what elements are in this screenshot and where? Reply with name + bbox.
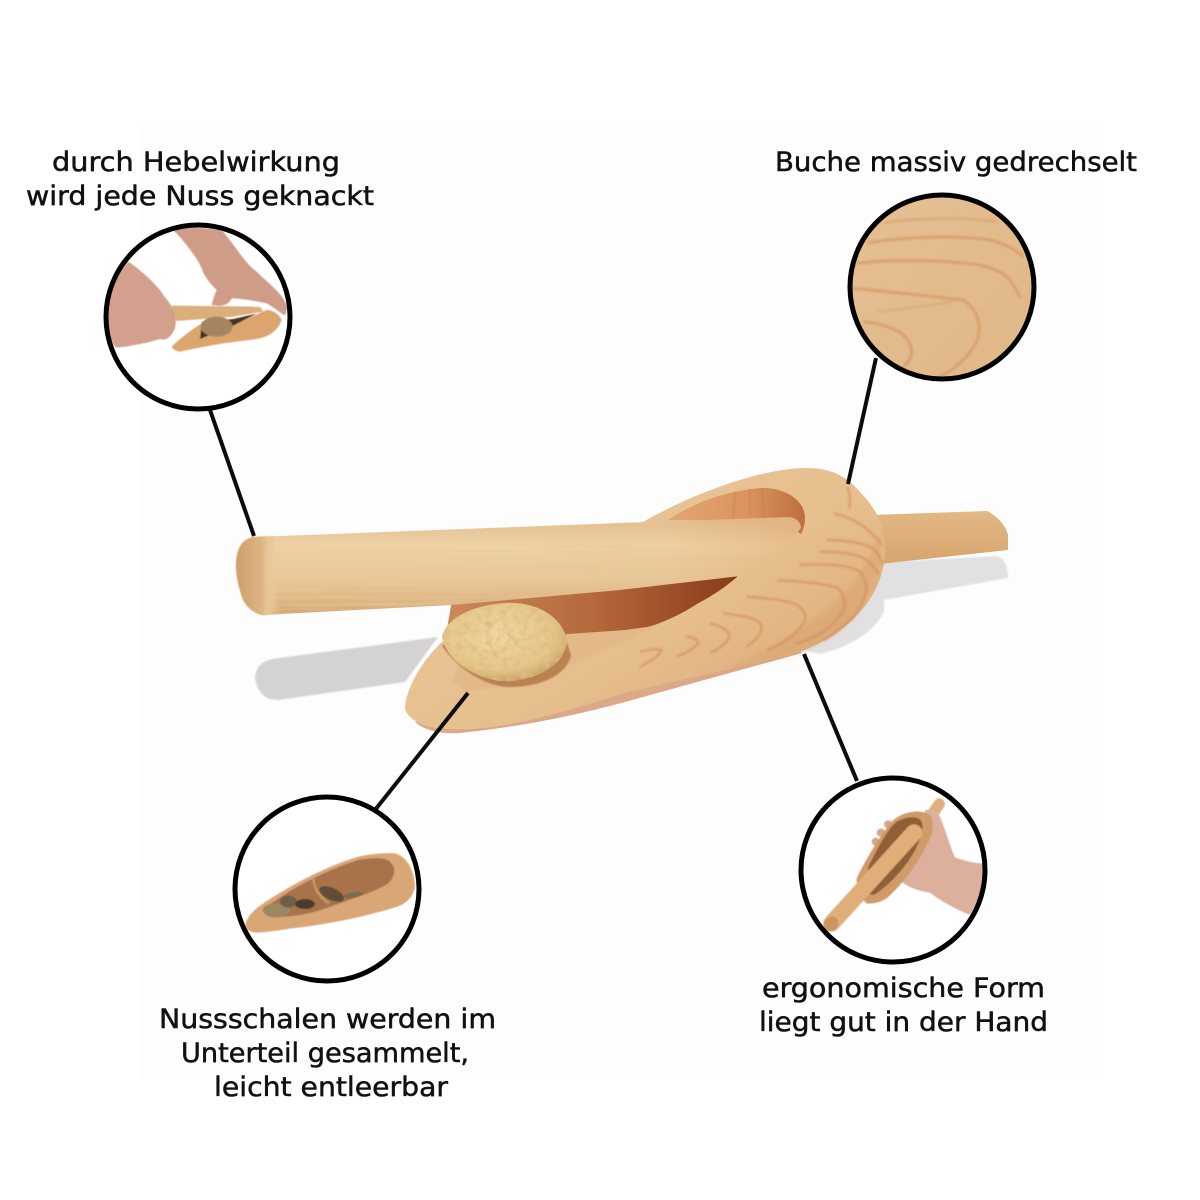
shadow left xyxy=(255,637,438,700)
connector line: shell inset to bowl xyxy=(375,693,468,810)
bowl right edge shading xyxy=(720,530,881,672)
walnut xyxy=(442,603,567,681)
shadow right xyxy=(800,556,1008,654)
inset circle: nutcracker held in hand xyxy=(801,778,985,962)
inset circle: hands cracking a nut xyxy=(106,225,290,409)
connector line: lever to leverage inset xyxy=(210,410,254,536)
connector line: hand inset to bowl xyxy=(804,654,857,781)
caption: ergonomic shape: liegt gut in der Hand xyxy=(759,1007,1048,1038)
caption: leverage: durch Hebelwirkung xyxy=(52,147,340,178)
bowl inner back wall xyxy=(445,570,737,640)
caption: leverage: wird jede Nuss geknackt xyxy=(26,181,374,212)
bowl upper hollow xyxy=(668,488,805,534)
connector line: wood inset to bowl xyxy=(848,358,876,484)
bowl floor xyxy=(452,600,690,692)
caption: nut shells: Nussschalen werden im xyxy=(159,1004,496,1035)
product photo: wooden nutcracker xyxy=(236,468,1008,733)
lever rod front xyxy=(236,517,801,615)
lever rod rear end xyxy=(870,511,1008,564)
caption: nut shells: Unterteil gesammelt, xyxy=(181,1038,469,1069)
caption: ergonomic shape xyxy=(759,973,1048,1038)
nut shadow xyxy=(442,640,571,687)
caption: leverage xyxy=(26,147,374,212)
caption: solid beech: Buche massiv gedrechselt xyxy=(775,147,1137,178)
bowl body xyxy=(405,468,885,729)
bowl growth rings xyxy=(640,487,882,667)
bowl lower lip xyxy=(415,640,802,733)
caption: nut shells: leicht entleerbar xyxy=(214,1072,448,1103)
caption: ergonomic shape: ergonomische Form xyxy=(762,973,1045,1004)
caption: nut shells xyxy=(159,1004,496,1103)
inset circle: collected nut shells xyxy=(235,797,419,981)
inset circle: beech wood grain xyxy=(850,195,1034,379)
